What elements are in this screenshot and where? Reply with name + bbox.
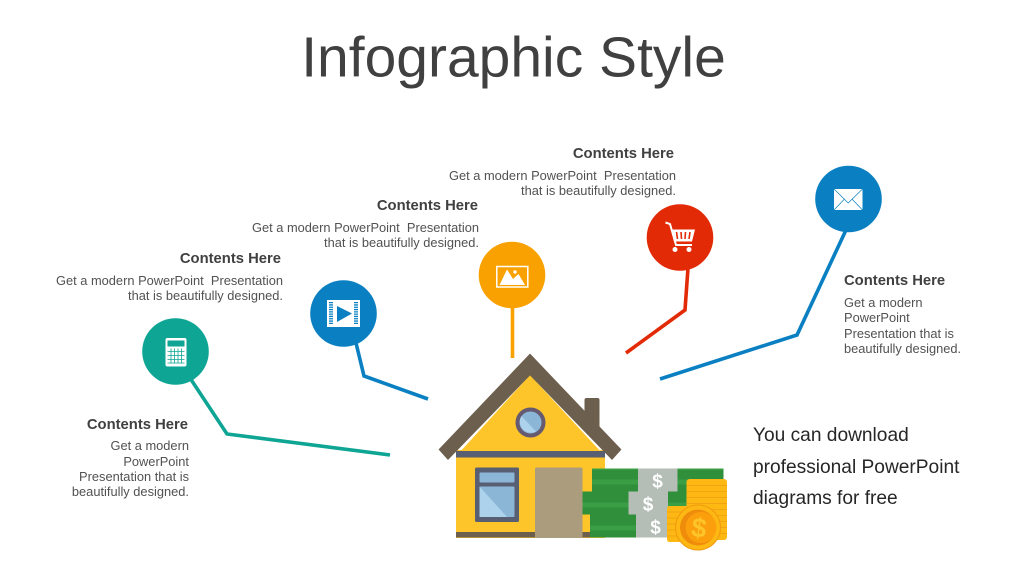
text block: lower left contents: PowerPoint — [123, 454, 189, 469]
middle bill stack — [582, 492, 686, 516]
text block: lower left contents — [72, 417, 189, 499]
text block: third contents: Contents Here — [180, 251, 281, 267]
text block: third contents: Get a modern PowerPoint Presentation — [56, 273, 283, 288]
text block: top contents: Contents Here — [573, 146, 674, 162]
illustration: house — [439, 354, 621, 538]
round attic window — [518, 410, 544, 436]
text block: lower left contents: Presentation that is — [79, 469, 189, 484]
text block: third contents — [56, 251, 283, 303]
illustration: money stacks — [582, 468, 724, 538]
connector: red — [626, 268, 688, 353]
connector: orange — [511, 305, 514, 358]
top bill stack: $ — [652, 472, 663, 492]
text block: right contents: PowerPoint — [844, 310, 910, 325]
eave band — [456, 451, 605, 458]
house gable — [459, 375, 602, 453]
connector: teal — [190, 378, 390, 455]
text block: lower left contents: Contents Here — [87, 417, 188, 433]
text block: right contents: Contents Here — [844, 273, 945, 289]
text block: top contents: Get a modern PowerPoint Presentation — [449, 168, 676, 183]
icon: video — [310, 280, 377, 347]
text block: second contents: Contents Here — [377, 198, 478, 214]
text block: top contents: that is beautifully designed. — [521, 183, 676, 198]
middle bill stack: $ — [643, 494, 654, 516]
top bill stack — [592, 468, 724, 492]
text block: download note: You can download — [753, 425, 909, 446]
door — [535, 468, 582, 538]
connector: blue video — [356, 343, 428, 399]
bottom bill stack — [590, 514, 672, 538]
icon: calculator — [142, 318, 209, 385]
title: Infographic Style — [301, 26, 726, 90]
text block: top contents — [449, 146, 676, 198]
illustration: coins — [667, 479, 727, 550]
short coin stack — [667, 506, 699, 542]
icon: picture — [479, 242, 545, 308]
connector: blue mail — [660, 230, 846, 379]
house wall — [456, 450, 605, 538]
text block: lower left contents: Get a modern — [110, 438, 189, 453]
base strip — [456, 532, 591, 538]
icon: envelope — [815, 166, 882, 232]
text block: right contents — [844, 273, 961, 356]
text block: download note: diagrams for free — [753, 488, 898, 509]
text block: right contents: Presentation that is — [844, 326, 954, 341]
text block: second contents: Get a modern PowerPoint Presentation — [252, 220, 479, 235]
large dollar coin: $ — [689, 512, 708, 544]
tall coin stack — [686, 479, 727, 540]
text block: second contents: that is beautifully designed. — [324, 235, 479, 250]
roof — [439, 354, 621, 460]
front window — [475, 468, 519, 522]
chimney — [584, 398, 600, 432]
text block: download note — [753, 425, 960, 509]
text block: third contents: that is beautifully designed. — [128, 288, 283, 303]
text block: lower left contents: beautifully designed. — [72, 484, 189, 499]
text block: second contents — [252, 198, 479, 250]
bottom bill stack: $ — [650, 518, 661, 538]
text block: download note: professional PowerPoint — [753, 457, 960, 478]
icon: shopping cart — [647, 204, 713, 271]
text block: right contents: beautifully designed. — [844, 341, 961, 356]
text block: right contents: Get a modern — [844, 295, 923, 310]
